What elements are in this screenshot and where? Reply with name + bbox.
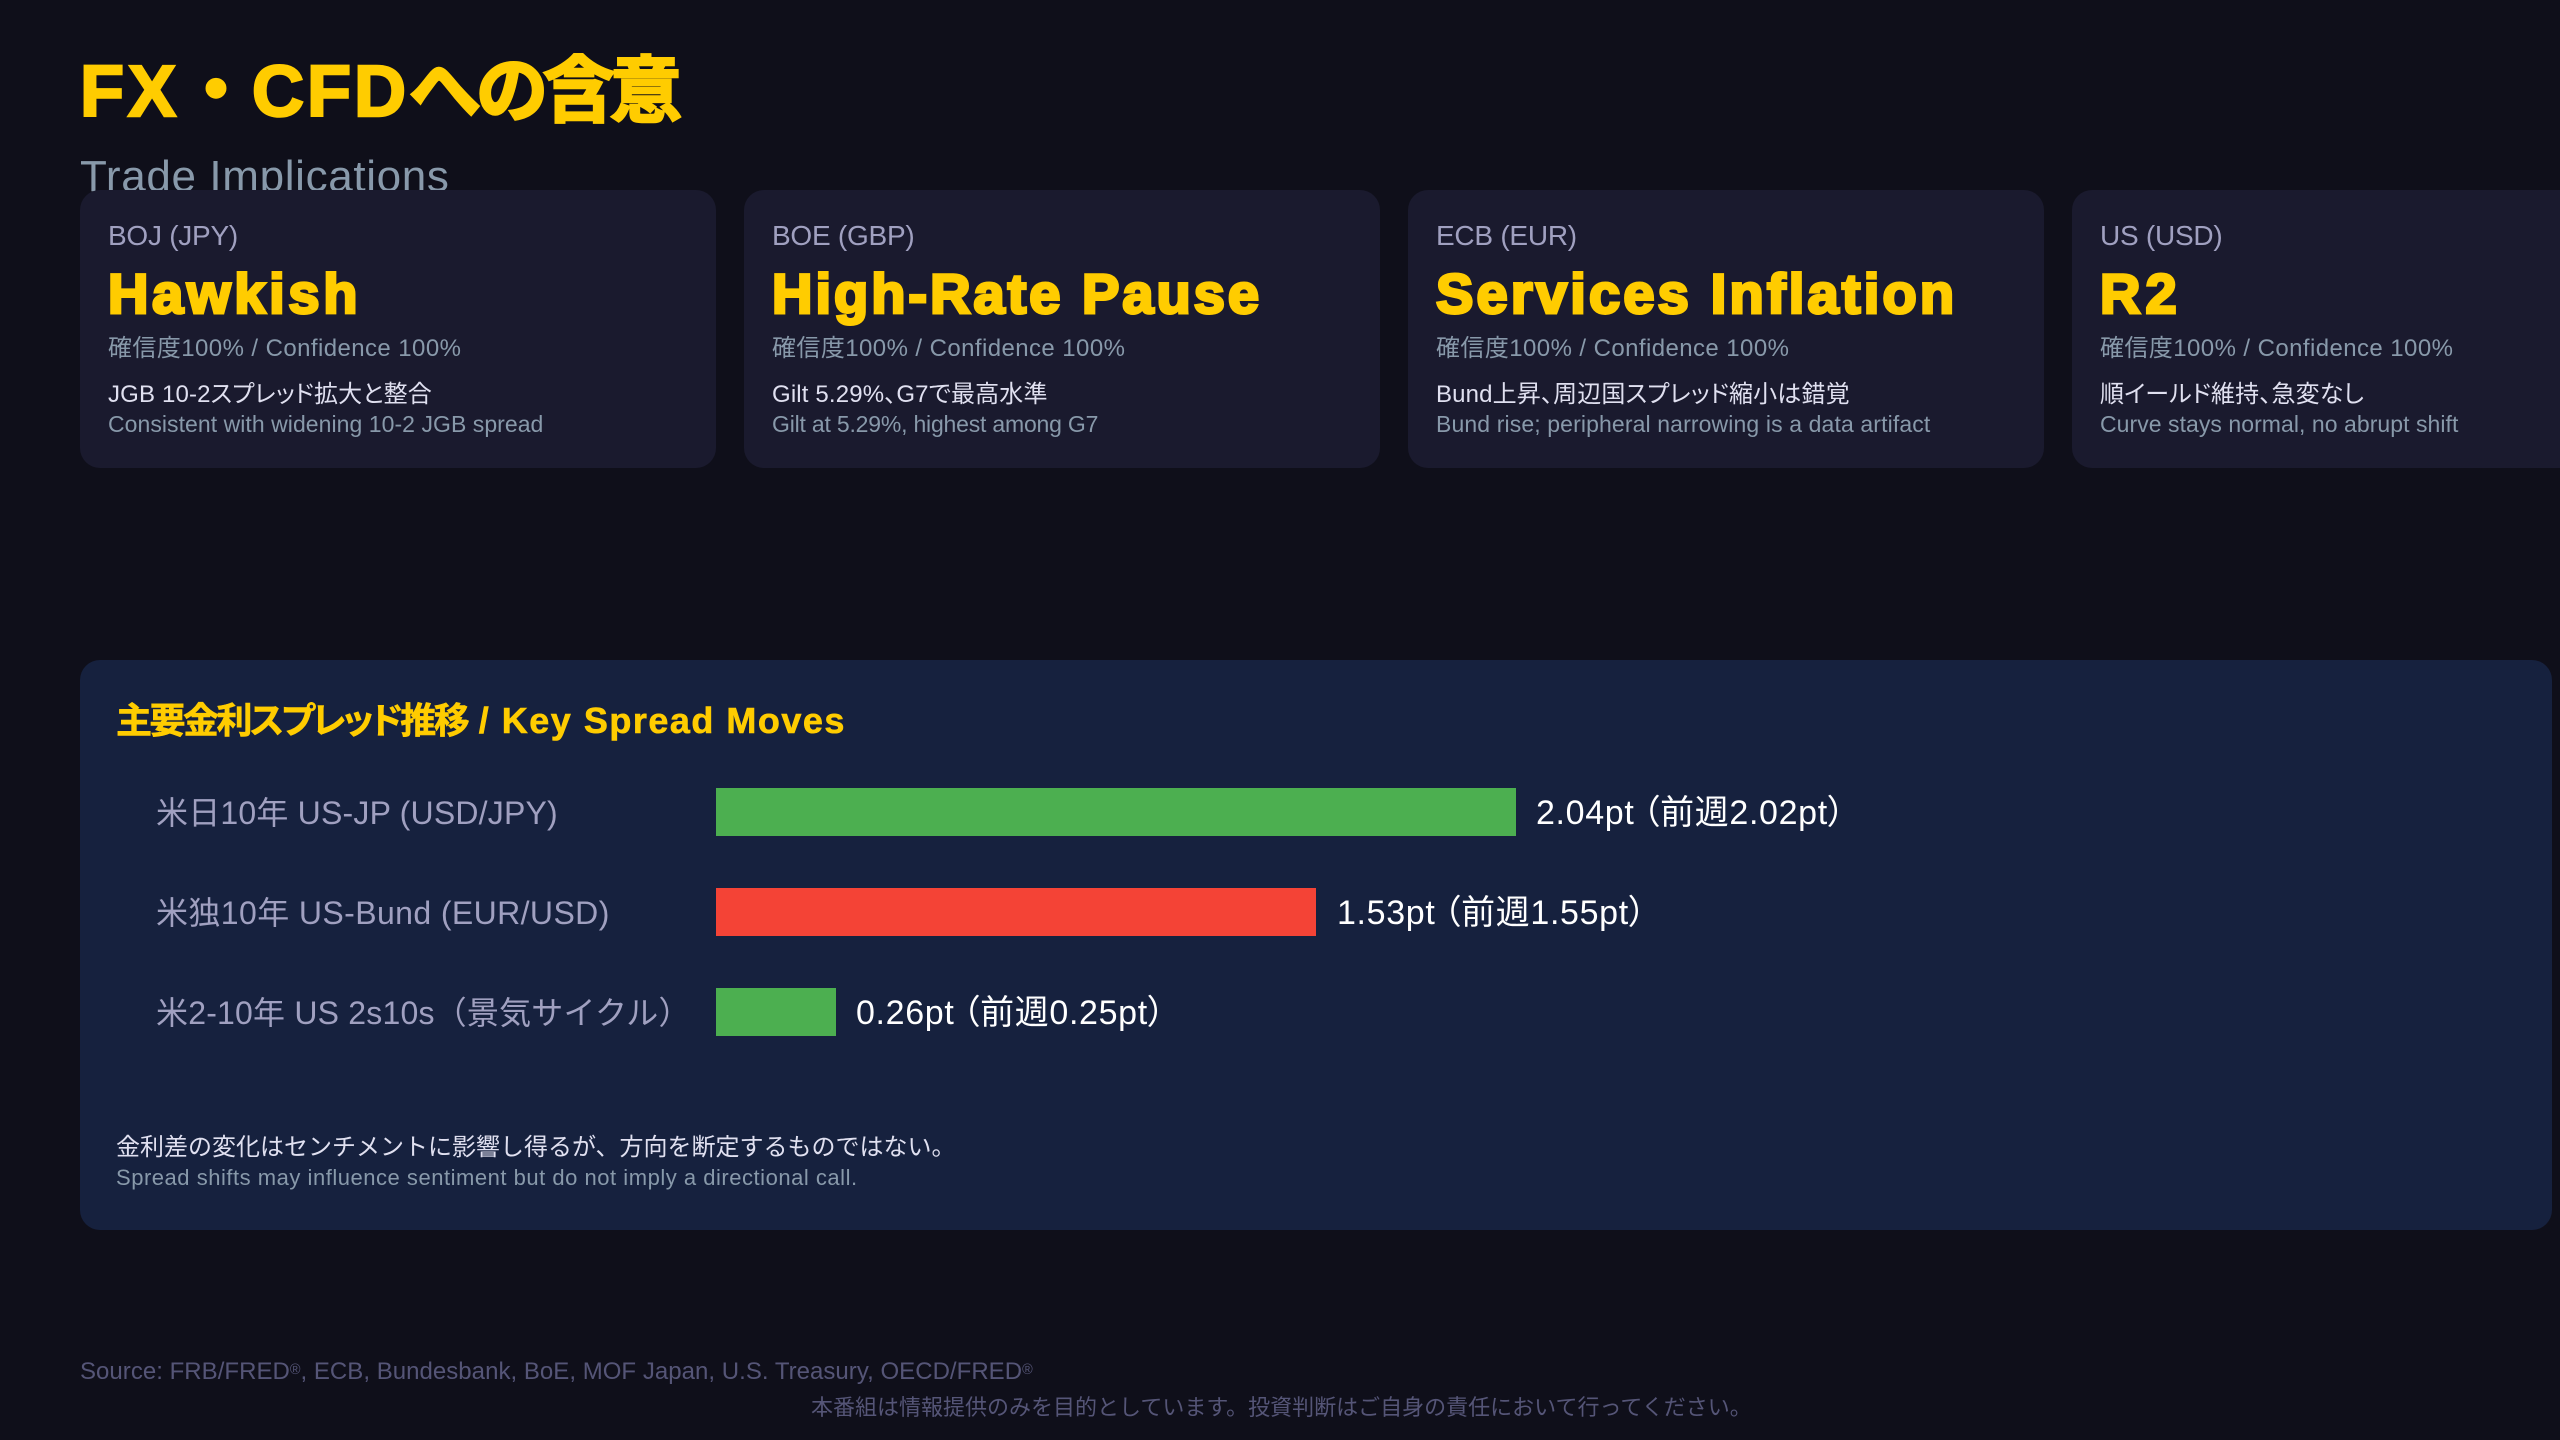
- value: US 2s10s: 0.26pt（前週0.25pt）: [856, 994, 1165, 1032]
- source line: Source: FRB/FRED®, ECB, Bundesbank, BoE, MOF Japan, U.S. Treasury, OECD/FRED®: [80, 1358, 1033, 1385]
- BOJ label: BOJ (JPY): [108, 220, 238, 251]
- BOJ call: Hawkish: [108, 262, 361, 325]
- BOE label: BOE (GBP): [772, 220, 914, 251]
- panel: US card: [2072, 190, 2560, 468]
- row label: US-Bund: 米独10年 US-Bund (EUR/USD): [156, 895, 610, 931]
- value: US-Bund: 1.53pt（前週1.55pt）: [1337, 894, 1646, 932]
- ECB label: ECB (EUR): [1436, 220, 1577, 251]
- bar: US-Bund: [716, 888, 1316, 936]
- BOE call: High-Rate Pause: [772, 262, 1262, 325]
- ECB English note: Bund rise; peripheral narrowing is a data artifact: [1436, 411, 1930, 437]
- disclaimer: 本番組は情報提供のみを目的としています。投資判断はご自身の責任において行ってください。: [811, 1395, 1752, 1420]
- US English note: Curve stays normal, no abrupt shift: [2100, 411, 2458, 437]
- panel: BOJ card: [80, 190, 716, 468]
- panel note English: Spread shifts may influence sentiment but do not imply a directional call.: [116, 1165, 858, 1190]
- bar: US 2s10s: [716, 988, 836, 1036]
- ECB confidence: 確信度100% / Confidence 100%: [1436, 335, 1789, 362]
- US label: US (USD): [2100, 220, 2222, 251]
- panel: BOE card: [744, 190, 1380, 468]
- BOJ confidence: 確信度100% / Confidence 100%: [108, 335, 461, 362]
- BOE confidence: 確信度100% / Confidence 100%: [772, 335, 1125, 362]
- BOE English note: Gilt at 5.29%, highest among G7: [772, 411, 1098, 437]
- BOJ Japanese note: JGB 10-2スプレッド拡大と整合: [108, 381, 432, 408]
- title: FX・CFDへの含意: [80, 52, 677, 132]
- row label: US-JP: 米日10年 US-JP (USD/JPY): [156, 795, 558, 831]
- panel: key spread moves: [80, 660, 2552, 1230]
- US call: R2: [2100, 262, 2182, 325]
- bar chart: [156, 788, 1845, 1036]
- panel: ECB card: [1408, 190, 2044, 468]
- bar: US-JP: [716, 788, 1516, 836]
- BOJ English note: Consistent with widening 10-2 JGB spread: [108, 411, 543, 437]
- chart heading: 主要金利スプレッド推移 / Key Spread Moves: [116, 700, 846, 741]
- US Japanese note: 順イールド維持、急変なし: [2100, 381, 2364, 408]
- panel note Japanese: 金利差の変化はセンチメントに影響し得るが、方向を断定するものではない。: [116, 1134, 956, 1161]
- US confidence: 確信度100% / Confidence 100%: [2100, 335, 2453, 362]
- ECB Japanese note: Bund上昇、周辺国スプレッド縮小は錯覚: [1436, 381, 1850, 408]
- ECB call: Services Inflation: [1436, 262, 1957, 325]
- row label: US 2s10s: 米2-10年 US 2s10s（景気サイクル）: [156, 995, 691, 1031]
- BOE Japanese note: Gilt 5.29%、G7で最高水準: [772, 381, 1048, 408]
- subtitle: Trade Implications: [80, 152, 450, 201]
- value: US-JP: 2.04pt（前週2.02pt）: [1536, 794, 1845, 832]
